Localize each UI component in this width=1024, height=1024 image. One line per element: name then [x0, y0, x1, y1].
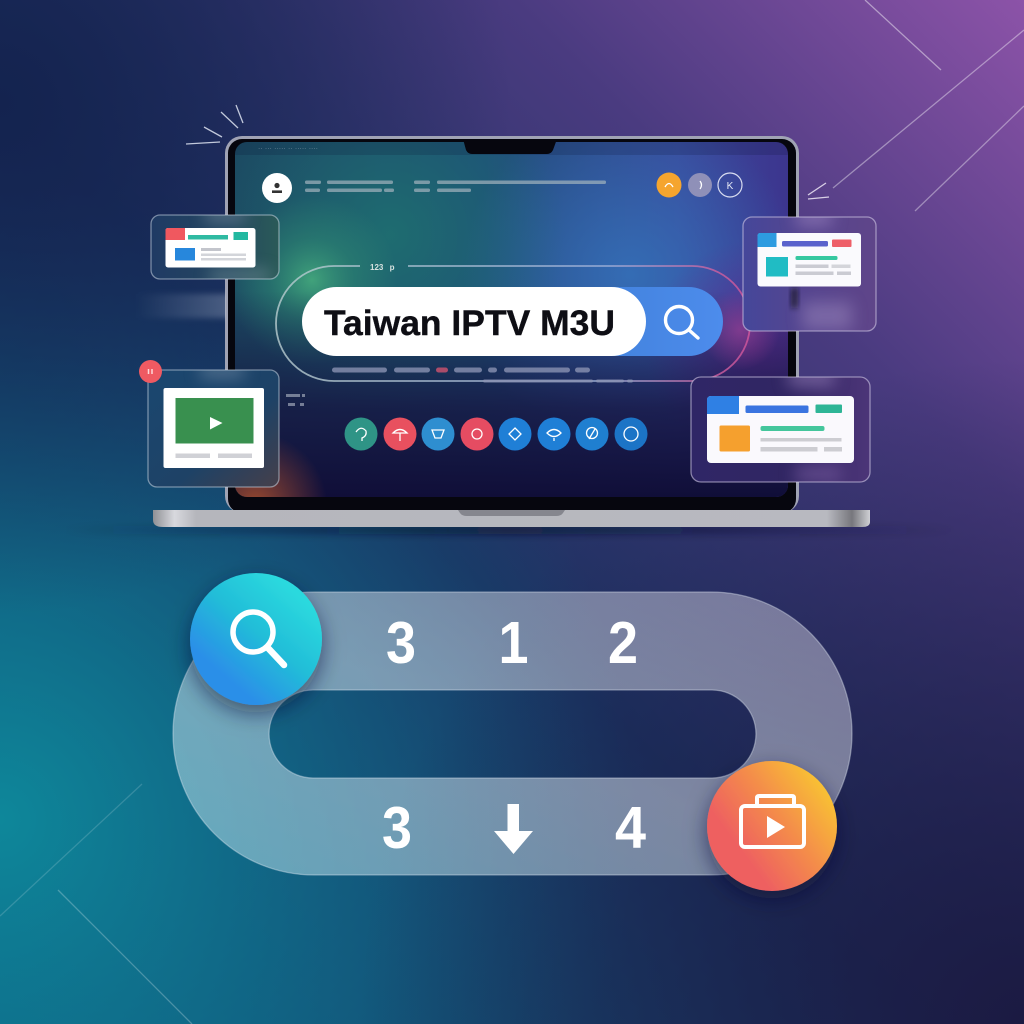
ring micro label: 123 p [370, 263, 395, 272]
laptop [153, 136, 870, 527]
video card body [164, 388, 264, 468]
header placeholder text bars [305, 180, 606, 192]
icon: teal circle [344, 418, 378, 450]
spark marks right of laptop [808, 183, 829, 199]
search button blue [560, 287, 723, 356]
search bar title text: Taiwan IPTV M3U [324, 304, 615, 343]
card body [707, 396, 854, 463]
icon: search magnifier [666, 306, 698, 338]
step number 2: 2 [608, 610, 638, 676]
camera notch [463, 139, 557, 154]
search ring outline [276, 266, 750, 381]
panel: floating card top left [151, 208, 279, 282]
icon: blue circle five [614, 418, 648, 450]
icon: blue circle [422, 418, 454, 450]
panel: steps loop track [173, 592, 852, 875]
header icon: outlined [718, 173, 742, 197]
laptop lid and bezel [225, 136, 799, 513]
motion blur streak left [152, 292, 226, 320]
laptop shadow [60, 526, 960, 534]
avatar icon [262, 173, 292, 203]
step number 4: 4 [615, 795, 646, 861]
spark marks top left of laptop [186, 105, 243, 144]
icon: blue circle four [576, 418, 608, 450]
red notification badge [139, 360, 162, 383]
search bar [302, 287, 723, 356]
card body [758, 233, 861, 286]
category icon row [344, 418, 648, 450]
step number 3 bottom: 3 [382, 795, 412, 861]
icon: blue circle two [498, 418, 532, 450]
card body [166, 228, 256, 268]
arrow down [494, 804, 533, 854]
laptop base [153, 510, 870, 527]
panel: floating video card bottom left [139, 360, 279, 487]
video thumbnail [176, 398, 254, 444]
icon: blue search circle [190, 573, 322, 705]
panel: floating card bottom right [691, 370, 870, 482]
header icon: grey [688, 173, 712, 197]
small left note bars [286, 394, 305, 406]
icon: red circle [384, 418, 416, 450]
step number 1: 1 [498, 610, 528, 676]
icon: orange play circle [707, 761, 837, 891]
icon: coral circle [460, 418, 494, 450]
screen top micro text: .. ... ..... .. ..... .... [258, 145, 318, 150]
step number 3 top: 3 [386, 610, 416, 676]
header icon: outlined: K [727, 181, 734, 192]
search bar white field [302, 287, 646, 356]
icon: blue circle three [538, 418, 570, 450]
laptop screen [235, 142, 788, 497]
panel: floating card top right [743, 210, 876, 331]
header icon: orange [656, 172, 682, 198]
placeholder bars under search [332, 368, 633, 382]
